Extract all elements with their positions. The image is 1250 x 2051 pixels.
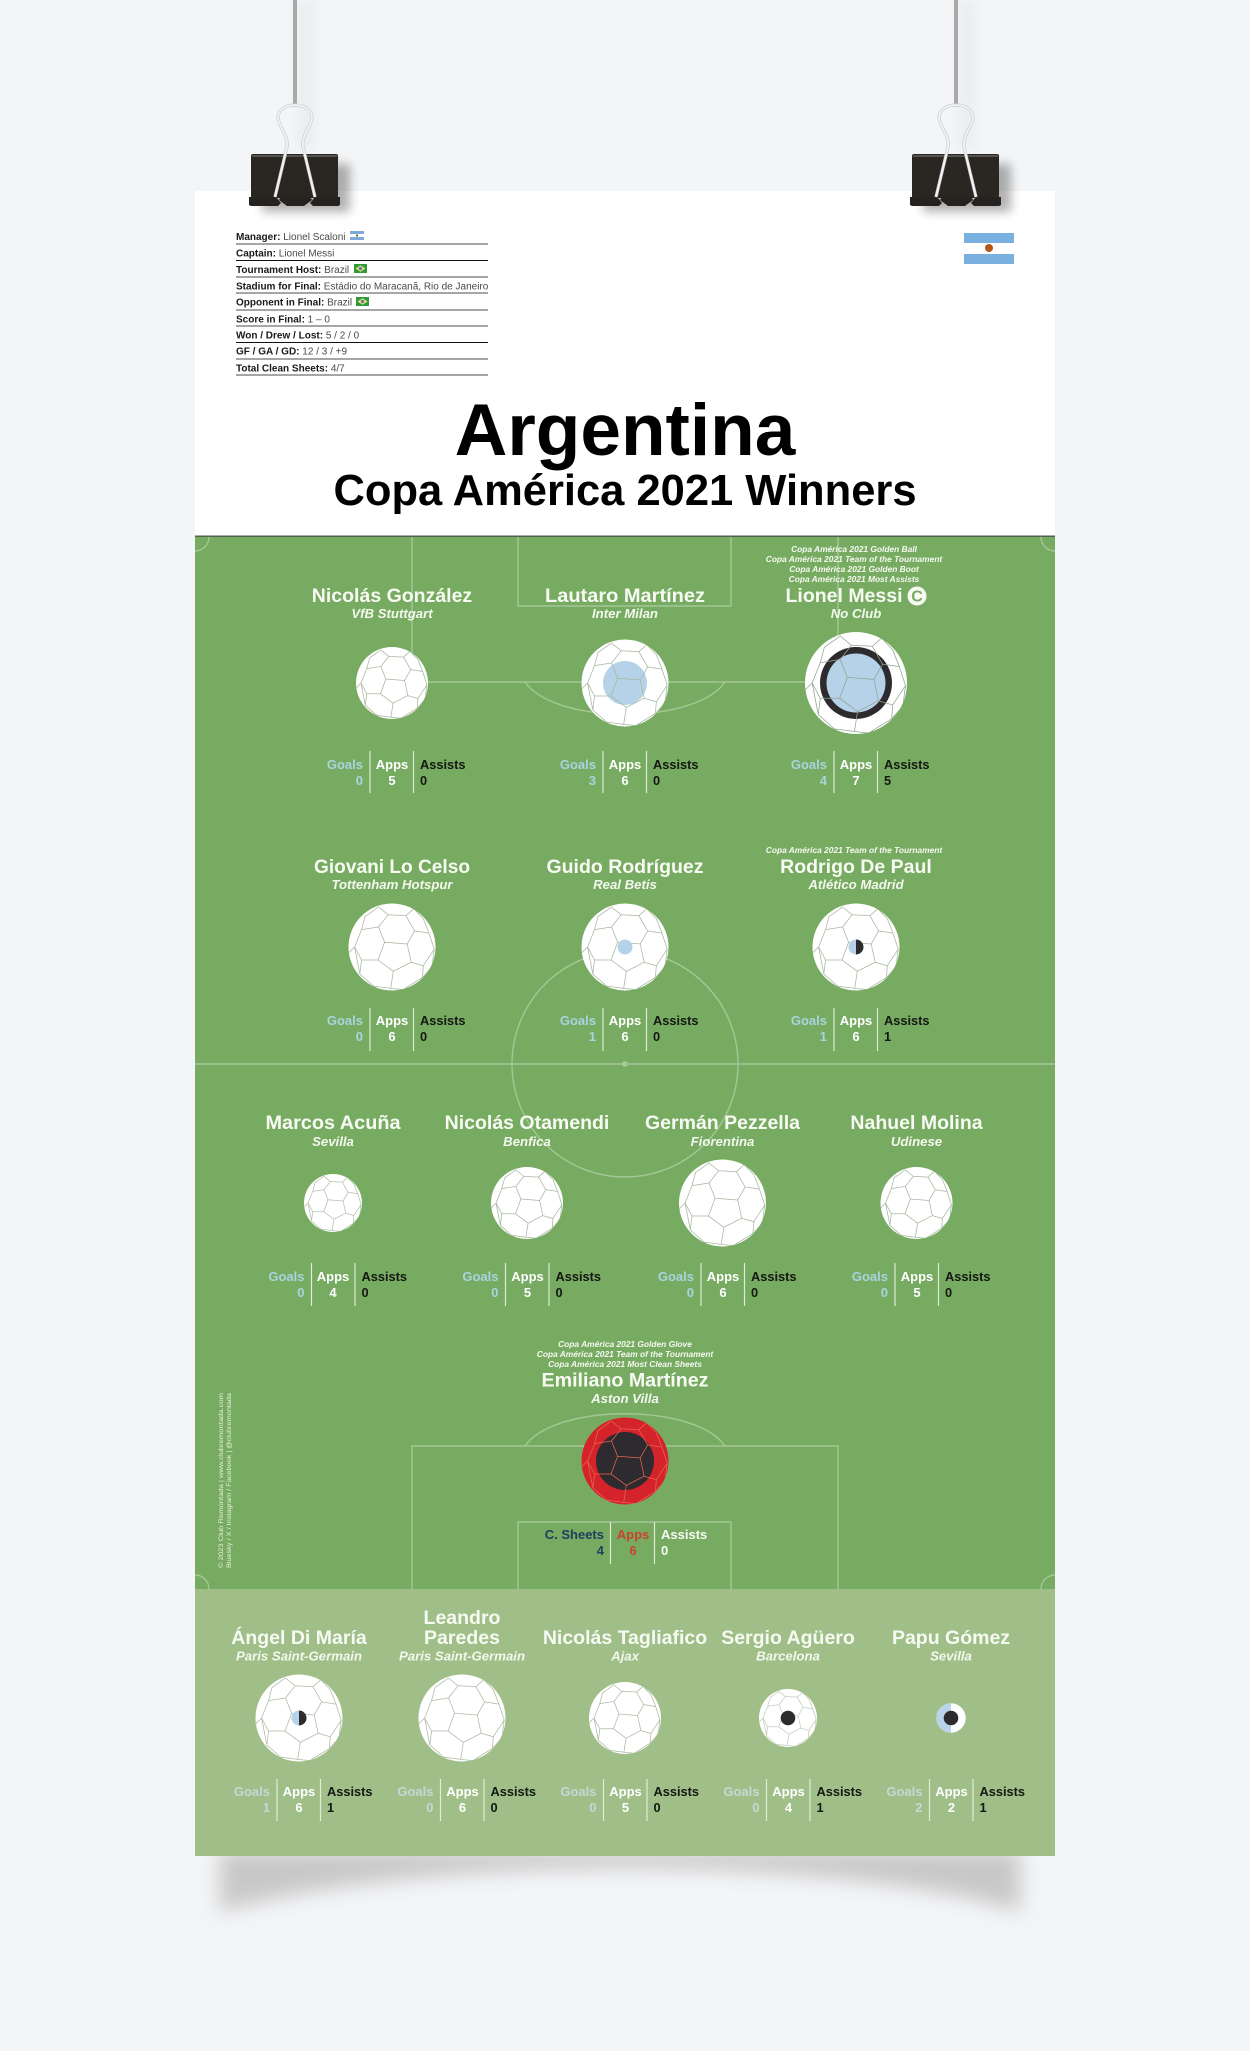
stats: Goals bbox=[791, 757, 827, 772]
substitute: Papu Gómez bbox=[886, 1627, 1025, 1821]
stats: 1 bbox=[263, 1800, 270, 1815]
stats: Apps bbox=[609, 1013, 641, 1028]
copyright bbox=[217, 1393, 233, 1568]
ball bbox=[491, 1167, 563, 1239]
stats: 6 bbox=[719, 1285, 727, 1300]
stats: Apps bbox=[511, 1269, 544, 1284]
player: Nicolás Otamendi bbox=[445, 1112, 609, 1306]
substitute: Sergio Agüero bbox=[721, 1627, 862, 1821]
stats: 5 bbox=[622, 1800, 629, 1815]
stats: 0 bbox=[751, 1285, 758, 1300]
row: goals: GF / GA / GD: 12 / 3 / +9 bbox=[236, 346, 347, 358]
stats: 6 bbox=[621, 773, 629, 788]
stats: Apps bbox=[935, 1784, 968, 1799]
stats: Goals bbox=[268, 1269, 304, 1284]
row: host: Tournament Host: Brazil bbox=[236, 265, 349, 276]
stats: 7 bbox=[852, 773, 860, 788]
stats bbox=[462, 1263, 601, 1306]
substitute: Nicolás Tagliafico: Nicolás Tagliafico bbox=[543, 1627, 707, 1649]
stats: 0 bbox=[945, 1285, 952, 1300]
stats: Assists bbox=[884, 757, 930, 772]
player: Nahuel Molina: Udinese bbox=[891, 1134, 942, 1149]
stats: 6 bbox=[459, 1800, 466, 1815]
player: Lionel Messi: Lionel Messi bbox=[785, 585, 903, 607]
row: stadium: Stadium for Final: Estádio do Maracanã, Rio de Janeiro bbox=[236, 282, 489, 292]
stats: Assists bbox=[661, 1527, 707, 1542]
poster sheet bbox=[195, 191, 1055, 536]
ball bbox=[256, 1674, 342, 1762]
player: Guido Rodríguez bbox=[546, 856, 704, 1051]
stats bbox=[723, 1779, 862, 1821]
player: Giovani Lo Celso: Giovani Lo Celso bbox=[314, 856, 470, 878]
stats: Assists bbox=[653, 757, 699, 772]
awards: Copa América 2021 Team of the Tournament bbox=[537, 1349, 714, 1359]
hanging wire right bbox=[954, 0, 976, 150]
awards: Copa América 2021 Golden Boot bbox=[789, 564, 920, 574]
stats: 0 bbox=[362, 1285, 369, 1300]
captain badge bbox=[908, 586, 926, 606]
ball bbox=[759, 1689, 817, 1747]
player: Rodrigo De Paul bbox=[766, 845, 943, 1051]
stats: Apps bbox=[707, 1269, 739, 1284]
player: Giovani Lo Celso bbox=[314, 856, 470, 1051]
stats: 0 bbox=[687, 1285, 694, 1300]
stats bbox=[545, 1522, 707, 1564]
info table bbox=[236, 231, 489, 375]
ball bbox=[589, 1682, 661, 1754]
ball bbox=[880, 1167, 952, 1239]
substitute: Leandro Paredes bbox=[397, 1607, 536, 1821]
stats: Goals bbox=[560, 1784, 596, 1799]
substitute: Ángel Di María: Paris Saint-Germain bbox=[236, 1648, 362, 1664]
stats: 6 bbox=[629, 1543, 637, 1558]
stats: Apps bbox=[283, 1784, 315, 1799]
captain badge: C bbox=[911, 588, 923, 606]
stats: Assists bbox=[653, 1013, 699, 1028]
row: captain: Captain: Lionel Messi bbox=[236, 248, 334, 260]
ball bbox=[356, 647, 428, 719]
stats: Apps bbox=[901, 1269, 933, 1284]
awards: Copa América 2021 Most Clean Sheets bbox=[548, 1359, 702, 1369]
stats: Goals bbox=[852, 1269, 888, 1284]
flag: Argentina bbox=[964, 233, 1014, 264]
stats: 6 bbox=[621, 1029, 629, 1044]
substitute: Leandro Paredes: Leandro bbox=[424, 1607, 501, 1629]
player: Nahuel Molina: Nahuel Molina bbox=[850, 1112, 983, 1134]
stats: Assists bbox=[420, 1013, 466, 1028]
stats: 5 bbox=[388, 773, 396, 788]
stats bbox=[658, 1263, 797, 1306]
substitute: Nicolás Tagliafico: Ajax bbox=[610, 1648, 640, 1664]
substitute: Leandro Paredes: Paredes bbox=[424, 1627, 500, 1649]
substitute: Papu Gómez: Papu Gómez bbox=[892, 1627, 1010, 1649]
stats: Assists bbox=[816, 1784, 862, 1799]
player: Nicolás González: Nicolás González bbox=[312, 585, 472, 607]
stats: Goals bbox=[791, 1013, 827, 1028]
player: Emiliano Martínez bbox=[537, 1339, 714, 1564]
stats bbox=[234, 1779, 373, 1821]
stats: 1 bbox=[589, 1029, 596, 1044]
stats bbox=[560, 1779, 699, 1821]
substitute: Papu Gómez: Sevilla bbox=[930, 1648, 972, 1664]
stats: Assists bbox=[751, 1269, 797, 1284]
stats: 0 bbox=[556, 1285, 563, 1300]
player: Rodrigo De Paul: Atlético Madrid bbox=[807, 877, 905, 892]
player: Lautaro Martínez bbox=[545, 585, 705, 793]
stats: 2 bbox=[948, 1800, 955, 1815]
substitute: Sergio Agüero: Barcelona bbox=[756, 1648, 820, 1664]
stats: 0 bbox=[356, 1029, 363, 1044]
stats: Apps bbox=[617, 1527, 649, 1542]
awards: Copa América 2021 Most Assists bbox=[789, 574, 920, 584]
awards bbox=[766, 544, 943, 584]
player: Emiliano Martínez: Emiliano Martínez bbox=[542, 1370, 709, 1392]
stats bbox=[560, 751, 699, 793]
stats: Goals bbox=[560, 1013, 596, 1028]
stats: Assists bbox=[654, 1784, 699, 1799]
stats: 0 bbox=[491, 1285, 498, 1300]
icon: Brazil mini flag bbox=[354, 264, 367, 273]
ball bbox=[805, 632, 907, 734]
awards: Copa América 2021 Golden Glove bbox=[558, 1339, 692, 1349]
stats: 6 bbox=[852, 1029, 860, 1044]
substitute: Sergio Agüero: Sergio Agüero bbox=[721, 1627, 855, 1649]
stats bbox=[886, 1779, 1025, 1821]
stats: Apps bbox=[317, 1269, 349, 1284]
ball bbox=[418, 1674, 506, 1762]
stats: Apps bbox=[376, 1013, 408, 1028]
stats: 1 bbox=[884, 1029, 891, 1044]
stats: Apps bbox=[446, 1784, 479, 1799]
stats: 1 bbox=[980, 1800, 987, 1815]
stats: 0 bbox=[426, 1800, 434, 1815]
substitute: Leandro Paredes: Paris Saint-Germain bbox=[399, 1648, 525, 1664]
stats: Apps bbox=[609, 757, 641, 772]
stats: Goals bbox=[397, 1784, 434, 1799]
stats: 5 bbox=[524, 1285, 531, 1300]
stats: 0 bbox=[589, 1800, 596, 1815]
stats: 2 bbox=[915, 1800, 922, 1815]
player: Guido Rodríguez: Real Betis bbox=[593, 877, 657, 892]
awards: Copa América 2021 Team of the Tournament bbox=[766, 554, 943, 564]
stats: 4 bbox=[329, 1285, 337, 1300]
ball bbox=[679, 1160, 766, 1246]
ball bbox=[582, 640, 668, 726]
ball bbox=[812, 904, 900, 990]
ball bbox=[304, 1174, 362, 1232]
substitute: Nicolás Tagliafico bbox=[543, 1627, 707, 1821]
stats: Apps bbox=[840, 757, 872, 772]
stats: 0 bbox=[653, 773, 660, 788]
stats: 4 bbox=[597, 1543, 605, 1558]
stats bbox=[791, 1008, 930, 1051]
player: Emiliano Martínez: Aston Villa bbox=[590, 1391, 659, 1406]
stats: Assists bbox=[556, 1269, 601, 1284]
player: Marcos Acuña: Sevilla bbox=[312, 1134, 354, 1149]
stats: 0 bbox=[661, 1543, 668, 1558]
copyright: Bluesky / X / Instagram / Facebook | @clubremontada bbox=[226, 1393, 233, 1568]
stats: 5 bbox=[913, 1285, 921, 1300]
stats: Assists bbox=[490, 1784, 536, 1799]
substitutes panel bbox=[195, 1589, 1055, 1856]
stats: 0 bbox=[654, 1800, 661, 1815]
player: Lautaro Martínez: Lautaro Martínez bbox=[545, 585, 705, 607]
stats: Assists bbox=[945, 1269, 991, 1284]
stats: Assists bbox=[362, 1269, 407, 1284]
binder clip left bbox=[249, 105, 350, 212]
player: Marcos Acuña: Marcos Acuña bbox=[266, 1112, 401, 1134]
stats: Goals bbox=[462, 1269, 498, 1284]
player: Germán Pezzella bbox=[645, 1112, 800, 1306]
stats: Assists bbox=[420, 757, 466, 772]
stats bbox=[327, 1008, 466, 1051]
title: Argentina bbox=[455, 390, 797, 471]
stats bbox=[791, 751, 930, 793]
stats: Apps bbox=[609, 1784, 642, 1799]
player: Germán Pezzella: Fiorentina bbox=[691, 1134, 754, 1149]
stats: Apps bbox=[840, 1013, 872, 1028]
stats: 4 bbox=[820, 773, 828, 788]
binder clip right bbox=[910, 105, 1011, 212]
award: Copa América 2021 Team of the Tournament bbox=[766, 845, 943, 855]
stats: 1 bbox=[327, 1800, 334, 1815]
stats: Assists bbox=[327, 1784, 373, 1799]
stats: 3 bbox=[589, 773, 596, 788]
stats: Goals bbox=[327, 757, 363, 772]
stats: Goals bbox=[327, 1013, 363, 1028]
row: opponent: Opponent in Final: Brazil bbox=[236, 298, 352, 308]
player: Nicolás Otamendi: Benfica bbox=[503, 1134, 551, 1149]
stats: 0 bbox=[490, 1800, 498, 1815]
player: Guido Rodríguez: Guido Rodríguez bbox=[546, 856, 704, 878]
icon: Brazil mini flag bbox=[356, 297, 369, 306]
stats bbox=[397, 1779, 536, 1821]
ball bbox=[582, 904, 668, 990]
stats: 0 bbox=[297, 1285, 304, 1300]
player: Nicolás Otamendi: Nicolás Otamendi bbox=[445, 1112, 609, 1134]
stats: Assists bbox=[884, 1013, 930, 1028]
stats bbox=[268, 1263, 407, 1306]
pitch bbox=[195, 536, 1055, 1589]
stats: 1 bbox=[820, 1029, 827, 1044]
substitute: Ángel Di María: Ángel Di María bbox=[231, 1626, 367, 1649]
stats: 0 bbox=[420, 773, 427, 788]
stats: Assists bbox=[980, 1784, 1025, 1799]
awards: Copa América 2021 Golden Ball bbox=[791, 544, 918, 554]
player: Nicolás González bbox=[312, 585, 472, 793]
stats: 0 bbox=[356, 773, 363, 788]
ball bbox=[936, 1703, 966, 1733]
stats: 0 bbox=[653, 1029, 660, 1044]
subtitle: Copa América 2021 Winners bbox=[333, 467, 917, 515]
player: Rodrigo De Paul: Rodrigo De Paul bbox=[780, 856, 932, 878]
row: score: Score in Final: 1 – 0 bbox=[236, 314, 330, 326]
stats bbox=[560, 1008, 699, 1051]
stats: 5 bbox=[884, 773, 891, 788]
stats: 4 bbox=[785, 1800, 793, 1815]
player: Nicolás González: VfB Stuttgart bbox=[351, 606, 433, 621]
stats: Goals bbox=[560, 757, 596, 772]
player: Lionel Messi bbox=[766, 544, 943, 793]
player: Nahuel Molina bbox=[850, 1112, 991, 1306]
player: Giovani Lo Celso: Tottenham Hotspur bbox=[331, 877, 453, 892]
row: clean sheets: Total Clean Sheets: 4/7 bbox=[236, 364, 345, 374]
ball bbox=[582, 1418, 668, 1504]
stats: C. Sheets bbox=[545, 1527, 604, 1542]
stats: 6 bbox=[295, 1800, 303, 1815]
hanging wire left bbox=[293, 0, 315, 150]
stats: Goals bbox=[658, 1269, 694, 1284]
stats: Goals bbox=[886, 1784, 922, 1799]
stats: Goals bbox=[723, 1784, 760, 1799]
awards bbox=[537, 1339, 714, 1369]
player: Marcos Acuña bbox=[266, 1112, 407, 1306]
player: Lionel Messi: No Club bbox=[831, 606, 881, 621]
stats: 0 bbox=[881, 1285, 888, 1300]
icon: Argentina mini flag bbox=[350, 231, 364, 240]
stats: Apps bbox=[376, 757, 408, 772]
ball bbox=[348, 904, 436, 990]
player: Lautaro Martínez: Inter Milan bbox=[592, 606, 658, 621]
stats: Apps bbox=[772, 1784, 805, 1799]
row: manager: Manager: Lionel Scaloni bbox=[236, 232, 346, 243]
substitute: Ángel Di María bbox=[231, 1626, 373, 1821]
poster drop shadow bbox=[220, 1850, 1020, 1912]
stats: Goals bbox=[234, 1784, 270, 1799]
stats: 0 bbox=[420, 1029, 427, 1044]
row: record: Won / Drew / Lost: 5 / 2 / 0 bbox=[236, 330, 360, 342]
stats bbox=[852, 1263, 991, 1306]
stats bbox=[327, 751, 466, 793]
stats: 1 bbox=[816, 1800, 824, 1815]
player: Germán Pezzella: Germán Pezzella bbox=[645, 1112, 800, 1134]
copyright: © 2023 Club Remontada | www.clubremontada.com bbox=[217, 1393, 225, 1568]
stats: 0 bbox=[752, 1800, 760, 1815]
stats: 6 bbox=[388, 1029, 396, 1044]
